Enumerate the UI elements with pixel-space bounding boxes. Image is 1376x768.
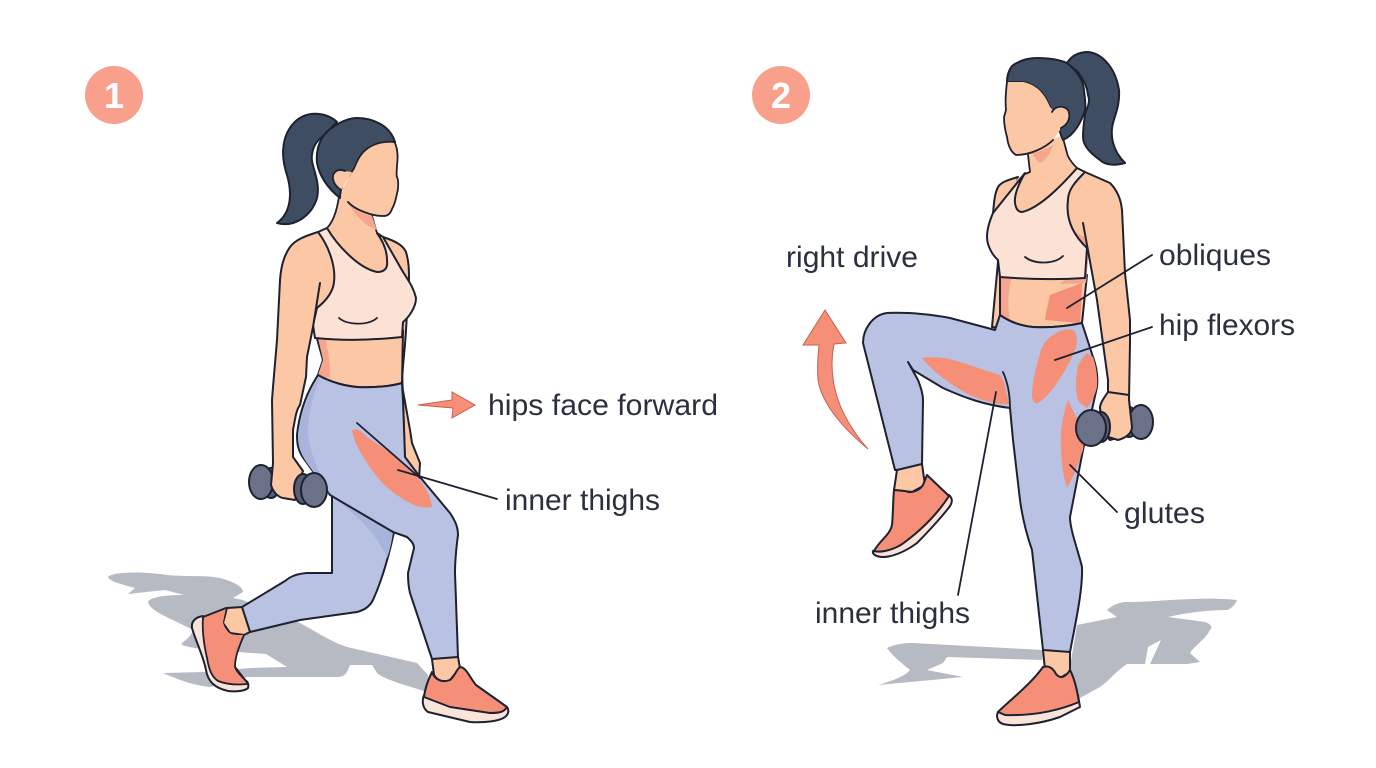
- neck shadow: [1032, 145, 1053, 163]
- step 1 badge: [85, 66, 143, 124]
- dumbbell bar and far plate: [1100, 405, 1153, 439]
- back shoe: [192, 608, 248, 691]
- ground shadow 2: [878, 599, 1237, 698]
- label: glutes: glutes: [1124, 497, 1205, 530]
- label: inner thighs: inner thighs: [815, 597, 970, 630]
- ponytail: [1067, 52, 1125, 165]
- thigh crease: [357, 423, 420, 478]
- leggings front leg: [297, 375, 458, 659]
- dumbbell near plate: [1076, 410, 1110, 446]
- torso side shading: [314, 300, 330, 378]
- ground shadow 1: [108, 573, 428, 692]
- near arm: [1083, 172, 1132, 440]
- label line: inner thighs: [958, 392, 996, 595]
- label: hip flexors: hip flexors: [1159, 309, 1295, 342]
- face outline: [1004, 82, 1053, 155]
- label: hips face forward: hips face forward: [488, 389, 718, 422]
- ponytail: [277, 114, 337, 224]
- raised thigh inner muscle: [922, 357, 1009, 404]
- face: [342, 142, 398, 216]
- torso left shade: [1001, 278, 1012, 320]
- dumbbell left plate: [249, 465, 305, 499]
- hand: [1100, 392, 1132, 440]
- leggings: [863, 313, 1097, 653]
- neck and chest: [308, 190, 390, 312]
- label: inner thighs: inner thighs: [505, 484, 660, 517]
- thigh crease: [1003, 372, 1010, 408]
- standing shoe: [997, 667, 1080, 725]
- inner thigh muscle: [352, 429, 432, 507]
- side shade: [1060, 232, 1090, 284]
- standing ankle: [1043, 650, 1070, 678]
- hip shade: [298, 378, 330, 495]
- bra curve: [1025, 256, 1063, 263]
- label: obliques: obliques: [1159, 239, 1271, 272]
- dumbbell right plate: [294, 473, 327, 507]
- step 2 badge: 2: [771, 75, 791, 116]
- ear: [1052, 107, 1069, 128]
- figure 2: knee drive: [786, 52, 1295, 725]
- neck and chest: [1000, 135, 1090, 250]
- step 1 badge: 1: [104, 75, 124, 116]
- label line: obliques: [1067, 255, 1152, 308]
- torso: [1000, 275, 1087, 327]
- motion arrow: [418, 392, 475, 418]
- ear: [333, 170, 352, 190]
- label line: glutes: [1070, 465, 1117, 512]
- raised ankle: [894, 464, 925, 492]
- sports bra: [313, 228, 416, 340]
- hair: [317, 118, 395, 198]
- torso: [316, 330, 403, 387]
- step 2 badge: [752, 66, 810, 124]
- front shoe: [423, 667, 508, 722]
- hip flexor muscle: [1032, 329, 1077, 403]
- back ankle: [223, 607, 250, 635]
- upper glute muscle: [1076, 353, 1097, 408]
- leggings back leg: [242, 495, 394, 632]
- neck outlines: [1025, 138, 1077, 174]
- lower glute muscle: [1061, 400, 1085, 488]
- sports bra: [987, 168, 1087, 279]
- near arm: [271, 232, 320, 500]
- neck outlines: [327, 190, 377, 233]
- far arm: [383, 237, 420, 480]
- hair: [1007, 58, 1085, 140]
- raised shoe: [873, 475, 952, 557]
- bra curve: [339, 318, 377, 324]
- neck shadow: [348, 202, 377, 230]
- front ankle: [432, 657, 460, 681]
- hairline: [345, 142, 395, 173]
- back leg shade: [333, 497, 393, 558]
- label line: inner thighs: [398, 470, 497, 499]
- figure 1: lunge: [108, 114, 718, 722]
- drive arrow: [803, 310, 868, 449]
- label: right drive: right drive: [786, 241, 918, 274]
- face outline: [348, 143, 398, 216]
- far arm strip: [992, 177, 1018, 328]
- oblique muscle: [1045, 283, 1082, 323]
- face: [1004, 82, 1060, 155]
- label line: hip flexors: [1055, 327, 1152, 360]
